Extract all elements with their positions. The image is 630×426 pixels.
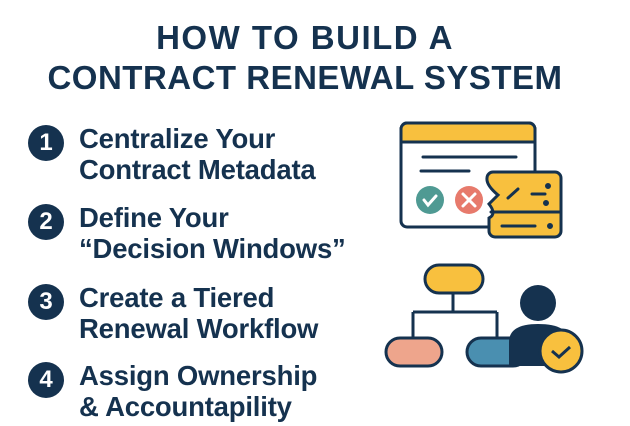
step 3: Renewal Workflow: [79, 313, 318, 344]
step 4: [28, 360, 317, 422]
step 2: “Decision Windows”: [79, 233, 346, 264]
step 2: Define Your: [79, 202, 229, 233]
step 4: Assign Ownership: [79, 360, 317, 391]
step 2: 2: [39, 208, 53, 235]
step 3: Create a Tiered: [79, 282, 274, 313]
step 4: & Accountapility: [79, 391, 292, 422]
step 3: 3: [39, 288, 53, 315]
step 3: [28, 282, 318, 344]
title: CONTRACT RENEWAL SYSTEM: [47, 59, 563, 96]
step 2: [28, 202, 346, 264]
step 1: 1: [39, 129, 53, 156]
step 4: 4: [39, 366, 53, 393]
step 1: Centralize Your: [79, 123, 275, 154]
step 1: [28, 123, 316, 185]
title: [47, 19, 563, 96]
title: HOW TO BUILD A: [156, 19, 454, 56]
step 1: Contract Metadata: [79, 154, 316, 185]
